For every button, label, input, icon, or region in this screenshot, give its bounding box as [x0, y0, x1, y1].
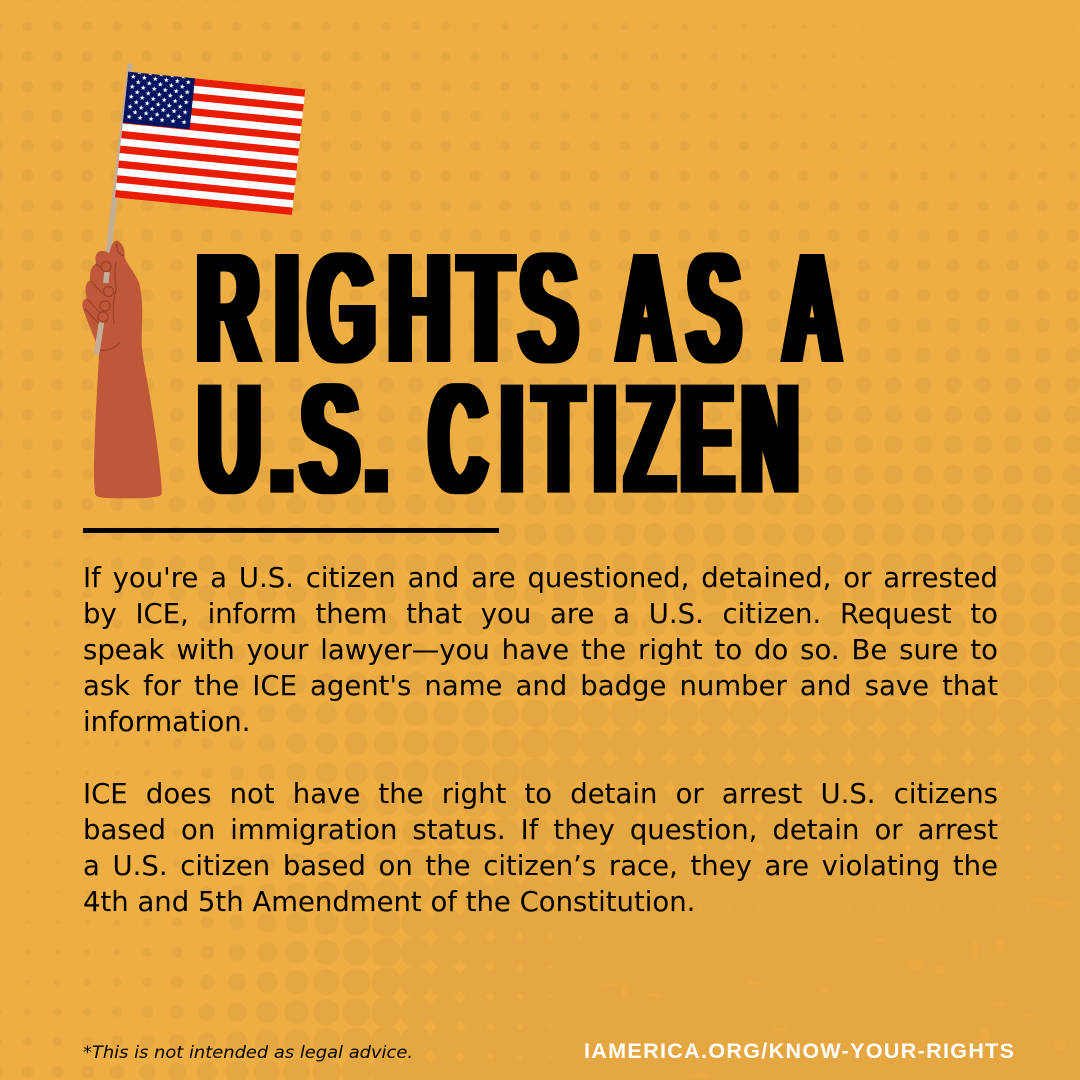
website URL: IAMERICA.ORG/KNOW-YOUR-RIGHTS	[584, 1039, 1014, 1063]
title line 2	[198, 350, 798, 527]
paragraph 2: based on immigration status. If they question, detain or arrest	[83, 814, 998, 846]
paragraph 2	[83, 778, 998, 918]
pole visible through the grip	[97, 272, 107, 352]
disclaimer: *This is not intended as legal advice.	[83, 1043, 413, 1062]
paragraph 1	[83, 562, 998, 738]
hand and forearm	[82, 241, 162, 498]
title line 1: AS	[617, 222, 740, 396]
flag pole	[97, 66, 130, 352]
divider rule	[83, 528, 499, 533]
paragraph 1: speak with your lawyer—you have the right to do so. Be sure to	[83, 634, 998, 666]
title line 1: A	[784, 222, 840, 396]
American flag	[115, 72, 305, 215]
paragraph 1: ask for the ICE agent's name and badge number and save that	[83, 670, 998, 702]
title line 1: RIGHTS	[197, 219, 577, 395]
icon: hand holding American flag	[82, 63, 306, 498]
paragraph 2: a U.S. citizen based on the citizen’s race, they are violating the	[83, 850, 998, 882]
paragraph 1: If you're a U.S. citizen and are questioned, detained, or arrested	[83, 562, 998, 594]
paragraph 2: ICE does not have the right to detain or arrest U.S. citizens	[83, 778, 998, 810]
paragraph 1: by ICE, inform them that you are a U.S. citizen. Request to	[83, 598, 998, 630]
title line 1	[197, 219, 840, 396]
paragraph 2: 4th and 5th Amendment of the Constitution.	[83, 886, 695, 918]
paragraph 1: information.	[83, 706, 250, 738]
title	[196, 219, 844, 520]
